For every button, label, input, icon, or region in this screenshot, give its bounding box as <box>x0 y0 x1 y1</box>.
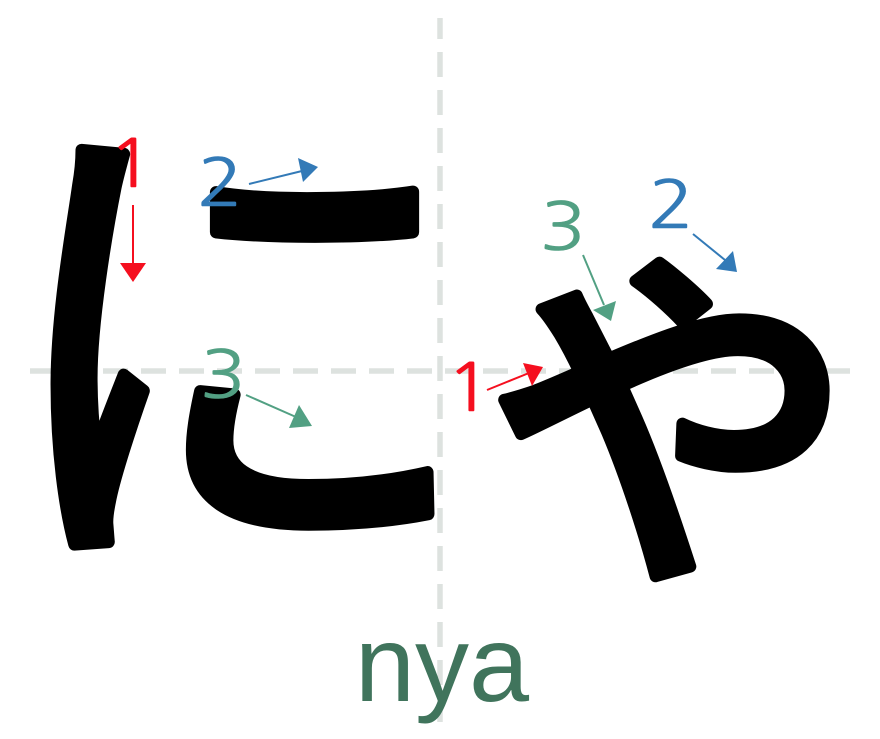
stroke 1 of ni: number and arrow: 1 <box>108 131 154 197</box>
stroke 1 of ni: number and arrow <box>108 131 154 282</box>
kana: ni: に <box>0 78 477 634</box>
romaji label: nya <box>355 603 530 724</box>
stroke 3 of ya: number and arrow: 3 <box>540 194 586 260</box>
stroke 3 of ni: number and arrow: 3 <box>200 342 246 408</box>
stroke 2 of ni: number and arrow <box>197 150 318 216</box>
stroke 2 of ya: number and arrow: 2 <box>648 172 694 238</box>
stroke 3 of ya: number and arrow <box>540 194 616 321</box>
stroke 2 of ni: number and arrow: 2 <box>197 150 243 216</box>
stroke 1 of ya: number and arrow <box>446 355 543 421</box>
stroke 1 of ya: number and arrow: 1 <box>446 355 492 421</box>
stroke 2 of ya: number and arrow <box>648 172 737 272</box>
stroke 3 of ni: number and arrow <box>200 342 312 428</box>
